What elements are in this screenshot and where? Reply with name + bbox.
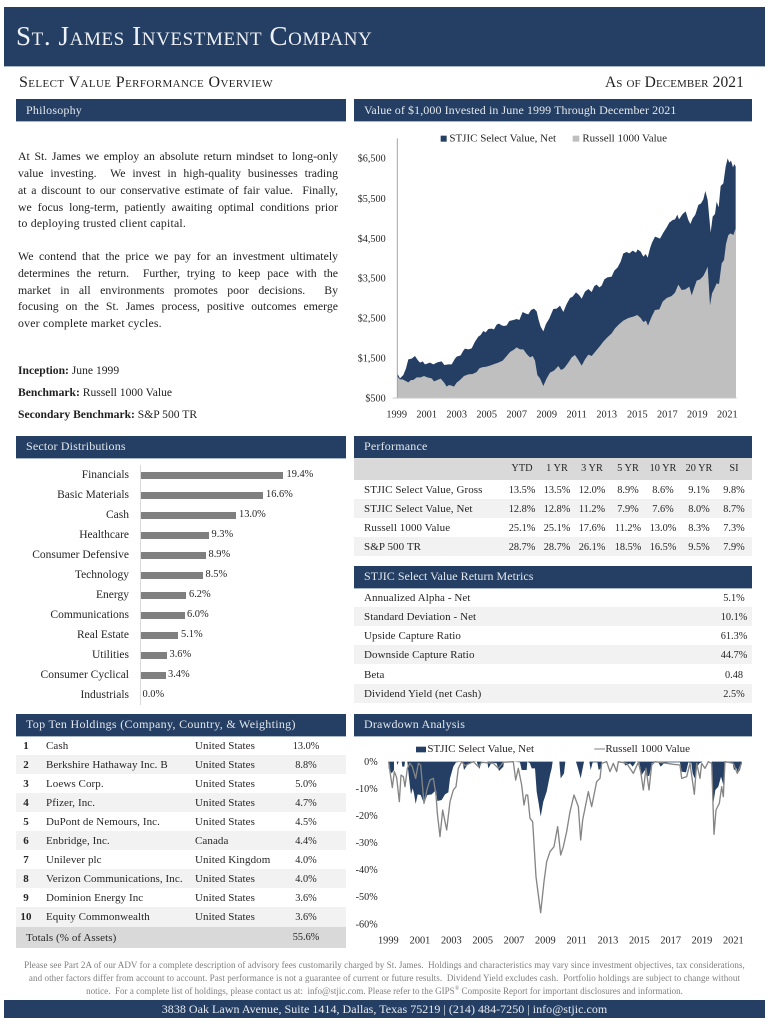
disclosure text: Please see Part 2A of our ADV for a complete description of advisory fees customarily charged by St. James. Holdings and characteristics may vary since investment objectives, tax considerations, <box>24 960 745 970</box>
holding 5: 5 <box>23 816 29 828</box>
paragraph two: We contend that the price we pay for an investment ultimately <box>18 249 338 263</box>
drawdown x axis labels: 2011 <box>567 935 587 946</box>
legend: Russell 1000 Value <box>582 133 667 145</box>
metric: dividend yield: 2.5% <box>723 689 745 700</box>
paragraph two: determines the return. Further, trying to keep pace with the <box>18 266 338 280</box>
row: gross: 8.6% <box>652 485 674 496</box>
drawdown x axis labels: 2001 <box>410 935 430 946</box>
drawdown x axis labels: 2015 <box>629 935 650 946</box>
holding 2: 2 <box>23 759 29 771</box>
y axis labels: $3,500 <box>358 274 386 285</box>
row: s&p 500: 28.7% <box>509 542 535 553</box>
drawdown y axis labels: -10% <box>356 784 378 795</box>
bar: cash: 13.0% <box>239 509 266 520</box>
heading: value of $1,000: Value of $1,000 Invested in June 1999 Through December 2021 <box>364 103 676 117</box>
disclosure text: and other factors differ from account to account. Past performance is not a guarantee of current or future results. Dividend Yield excludes cash. Portfolio holdings are subject to change without <box>29 973 740 983</box>
y axis labels: $1,500 <box>358 354 386 365</box>
holding 6 <box>16 831 346 850</box>
drawdown legend: STJIC Select Value, Net <box>427 743 534 755</box>
row: net <box>354 499 752 518</box>
metric: upside capture <box>364 630 747 642</box>
performance column headers: 5 YR <box>617 463 639 474</box>
bar: healthcare: 9.3% <box>212 529 233 540</box>
x axis labels <box>386 409 738 420</box>
y axis labels <box>358 154 386 405</box>
holding 4: 4.7% <box>295 798 317 809</box>
holding 1: 13.0% <box>293 741 319 752</box>
drawdown x axis labels <box>378 935 744 946</box>
holding 1: Cash <box>46 740 68 752</box>
paragraph two: market in all environments promotes poor decisions. By <box>18 283 338 297</box>
bar: energy <box>96 589 211 601</box>
holding 6: 6 <box>23 835 29 847</box>
holding 4 <box>16 793 346 812</box>
bar: industrials: 0.0% <box>142 689 164 700</box>
drawdown y axis labels: -30% <box>356 838 378 849</box>
disclosure text: notice. For a complete list of holdings, please contact us at: info@stjic.com. Please refer to the GIPS® Composite Report for important disclosures and information. <box>86 986 683 996</box>
metric: upside capture: 61.3% <box>721 631 747 642</box>
holding 1: 1 <box>23 740 29 752</box>
heading: sector distributions: Sector Distributions <box>26 439 126 453</box>
holding 10 <box>16 907 346 927</box>
bar: real estate: 5.1% <box>181 629 203 640</box>
heading: drawdown analysis <box>354 714 752 736</box>
row: s&p 500: 9.5% <box>688 542 710 553</box>
paragraph one: to deploying trusted client capital. <box>18 216 186 230</box>
metric: dividend yield <box>354 684 752 703</box>
row: s&p 500: 7.9% <box>723 542 745 553</box>
drawdown x axis labels: 2007 <box>504 935 524 946</box>
holding 9: 9 <box>23 892 29 904</box>
row: net: 12.8% <box>509 504 535 515</box>
bar: communications <box>50 609 209 621</box>
chart: sector distributions bar chart <box>32 465 313 705</box>
paragraph two: focusing on the St. James process, positive outcomes emerge <box>18 299 338 313</box>
performance column headers: 3 YR <box>581 463 603 474</box>
holding 2: 8.8% <box>295 760 317 771</box>
bar: industrials: Industrials <box>80 689 129 701</box>
drawdown y axis labels <box>356 757 378 930</box>
row: net: 7.9% <box>617 504 639 515</box>
heading: performance: Performance <box>364 439 428 453</box>
heading: philosophy: Philosophy <box>26 103 82 117</box>
drawdown x axis labels: 1999 <box>378 935 399 946</box>
bar: technology: Technology <box>75 569 129 581</box>
drawdown y axis labels: -60% <box>356 919 378 930</box>
holding 3: 3 <box>23 778 29 790</box>
drawdown legend <box>416 743 690 755</box>
metric: downside capture: Downside Capture Ratio <box>364 649 475 661</box>
bar: financials: Financials <box>82 469 129 481</box>
holding 9: Dominion Energy Inc <box>46 892 143 904</box>
row: russell 1000 value: 8.3% <box>688 523 710 534</box>
holding 10: Equity Commonwealth <box>46 911 150 923</box>
panel: philosophy text <box>18 149 338 421</box>
row: gross <box>364 484 745 496</box>
holding 5: 4.5% <box>295 817 317 828</box>
metric: standard deviation: Standard Deviation - Net <box>364 611 476 623</box>
row: s&p 500: 16.5% <box>650 542 676 553</box>
drawdown x axis labels: 2021 <box>723 935 744 946</box>
y axis labels: $500 <box>365 394 386 405</box>
row: russell 1000 value: Russell 1000 Value <box>364 522 450 534</box>
row: net: STJIC Select Value, Net <box>364 503 473 515</box>
metric: alpha: Annualized Alpha - Net <box>364 592 471 604</box>
row: gross: 9.8% <box>723 485 745 496</box>
heading: philosophy <box>16 99 346 121</box>
row: russell 1000 value: 7.3% <box>723 523 745 534</box>
row: gross: 13.5% <box>509 485 535 496</box>
paragraph two: over complete market cycles. <box>18 316 162 330</box>
benchmark: Benchmark: Russell 1000 Value <box>18 386 172 399</box>
row: net: 11.2% <box>579 504 605 515</box>
row: russell 1000 value <box>364 522 745 534</box>
performance column headers: 20 YR <box>686 463 712 474</box>
metric: standard deviation <box>354 607 752 626</box>
holding 7: Unilever plc <box>46 854 102 866</box>
row: net: 8.7% <box>723 504 745 515</box>
row: gross: 13.5% <box>544 485 570 496</box>
row: russell 1000 value: 25.1% <box>509 523 535 534</box>
paragraph one <box>18 149 338 230</box>
title: St. James Investment Company <box>16 21 372 51</box>
holding 9: 3.6% <box>295 893 317 904</box>
drawdown x axis labels: 2017 <box>660 935 681 946</box>
holding 5: United States <box>195 816 255 828</box>
heading: value of $1,000 <box>354 99 752 121</box>
holding 4: 4 <box>23 797 29 809</box>
heading: drawdown analysis: Drawdown Analysis <box>364 717 465 731</box>
row: net: 7.6% <box>652 504 674 515</box>
heading: top ten holdings <box>16 714 346 736</box>
holding 6: Enbridge, Inc. <box>46 835 110 847</box>
bar: healthcare <box>79 529 233 541</box>
performance column headers <box>354 458 752 480</box>
legend <box>441 133 667 145</box>
axes <box>393 138 737 398</box>
table: return metrics <box>354 592 752 703</box>
area: Russell 1000 Value <box>397 228 736 398</box>
bar: real estate: Real Estate <box>77 629 129 641</box>
bar: cash <box>106 509 266 521</box>
holding 3: United States <box>195 778 255 790</box>
row: s&p 500: S&P 500 TR <box>364 541 421 553</box>
y axis labels: $6,500 <box>358 154 386 165</box>
holding 10: 10 <box>20 911 32 923</box>
drawdown y axis labels: 0% <box>364 757 378 768</box>
holding 2: Berkshire Hathaway Inc. B <box>46 759 168 771</box>
bar: communications: Communications <box>50 609 129 621</box>
holding 6: 4.4% <box>295 836 317 847</box>
holding 1: United States <box>195 740 255 752</box>
holding 2 <box>16 755 346 774</box>
area: STJIC drawdown <box>389 762 742 817</box>
drawdown y axis labels: -40% <box>356 865 378 876</box>
holding 7: United Kingdom <box>195 854 270 866</box>
bar: cash: Cash <box>106 509 129 521</box>
metric: downside capture <box>354 645 752 664</box>
row: gross: 12.0% <box>579 485 605 496</box>
paragraph one: value investing. We invest in high-quality businesses trading <box>18 166 338 180</box>
performance column headers: SI <box>729 463 739 474</box>
bar: basic materials: 16.6% <box>266 489 293 500</box>
bar: basic materials: Basic Materials <box>57 489 129 501</box>
totals row <box>16 927 346 948</box>
row: russell 1000 value: 17.6% <box>579 523 605 534</box>
row: net: 8.0% <box>688 504 710 515</box>
holding 6: Canada <box>195 835 228 847</box>
bar: healthcare: Healthcare <box>79 529 129 541</box>
holding 10: United States <box>195 911 255 923</box>
row: s&p 500 <box>354 537 752 556</box>
holding 4: Pfizer, Inc. <box>46 797 95 809</box>
secondary benchmark: Secondary Benchmark: S&P 500 TR <box>18 408 197 421</box>
metric: beta: 0.48 <box>725 670 743 681</box>
bar: consumer cyclical: Consumer Cyclical <box>41 669 129 681</box>
inception: Inception: June 1999 <box>18 364 119 377</box>
bar: utilities: Utilities <box>92 649 129 661</box>
totals row: Totals (% of Assets) <box>26 932 116 944</box>
footer contact bar: 3838 Oak Lawn Avenue, Suite 1414, Dallas, Texas 75219 | (214) 484-7250 | info@stjic.com <box>162 1002 607 1016</box>
holding 3: Loews Corp. <box>46 778 104 790</box>
performance column headers: YTD <box>511 463 533 474</box>
subtitle: Select Value Performance Overview <box>19 74 273 91</box>
drawdown legend: Russell 1000 Value <box>605 743 690 755</box>
bar: consumer defensive: Consumer Defensive <box>32 549 129 561</box>
heading: return metrics: STJIC Select Value Return Metrics <box>364 569 533 583</box>
y axis labels: $5,500 <box>358 194 386 205</box>
paragraph two <box>18 249 338 330</box>
bar: real estate <box>77 629 203 641</box>
holding 8 <box>16 869 346 888</box>
holding 1 <box>23 740 319 752</box>
paragraph one: at a discount to our conservative estimate of fair value. Finally, <box>18 183 338 197</box>
holding 5: DuPont de Nemours, Inc. <box>46 816 160 828</box>
bar: utilities <box>92 649 191 661</box>
row: gross: 9.1% <box>688 485 710 496</box>
row: s&p 500: 28.7% <box>544 542 570 553</box>
holding 5 <box>23 816 317 828</box>
drawdown x axis labels: 2005 <box>472 935 493 946</box>
chart: drawdown analysis <box>356 743 744 946</box>
footer contact bar <box>4 1000 765 1018</box>
disclosure text <box>24 960 745 996</box>
metric: upside capture: Upside Capture Ratio <box>364 630 461 642</box>
totals row: 55.6% <box>293 932 319 943</box>
bar: utilities: 3.6% <box>170 649 191 660</box>
report date: As of December 2021 <box>605 74 744 91</box>
metric: downside capture: 44.7% <box>721 650 747 661</box>
area: STJIC Select Value, Net <box>397 158 736 398</box>
metric: beta <box>364 669 743 681</box>
holding 2: United States <box>195 759 255 771</box>
drawdown x axis labels: 2003 <box>441 935 462 946</box>
row: s&p 500: 26.1% <box>579 542 605 553</box>
legend: STJIC Select Value, Net <box>449 133 556 145</box>
bar: financials: 19.4% <box>286 469 313 480</box>
drawdown x axis labels: 2013 <box>598 935 618 946</box>
heading: sector distributions <box>16 436 346 458</box>
bar: consumer defensive: 8.9% <box>208 549 230 560</box>
performance column headers: 10 YR <box>650 463 676 474</box>
heading: top ten holdings: Top Ten Holdings (Company, Country, & Weighting) <box>26 717 296 731</box>
bar: communications: 6.0% <box>187 609 209 620</box>
row: gross: STJIC Select Value, Gross <box>364 484 483 496</box>
bar: industrials <box>80 689 164 701</box>
line: Russell 1000 drawdown <box>389 762 742 913</box>
row: net: 12.8% <box>544 504 570 515</box>
metric: alpha: 5.1% <box>723 593 745 604</box>
holding 8: 8 <box>23 873 29 885</box>
holding 4: United States <box>195 797 255 809</box>
metric: dividend yield: Dividend Yield (net Cash) <box>364 688 481 700</box>
y axis labels: $4,500 <box>358 234 386 245</box>
bar: consumer defensive <box>32 549 230 561</box>
bar: technology <box>75 569 227 581</box>
title banner <box>4 7 765 66</box>
bar: technology: 8.5% <box>206 569 227 580</box>
heading: performance <box>354 436 752 458</box>
chart: value of $1,000 area chart <box>358 133 738 420</box>
bar: consumer cyclical: 3.4% <box>168 669 190 680</box>
holding 8: Verizon Communications, Inc. <box>46 873 183 885</box>
holding 7: 7 <box>23 854 29 866</box>
holding 9 <box>23 892 317 904</box>
paragraph one: we focus long-term, patiently awaiting optimal conditions prior <box>18 200 338 214</box>
row: russell 1000 value: 11.2% <box>615 523 641 534</box>
drawdown x axis labels: 2009 <box>535 935 556 946</box>
holding 3: 5.0% <box>295 779 317 790</box>
holding 10: 3.6% <box>295 912 317 923</box>
row: gross: 8.9% <box>617 485 639 496</box>
bar: energy: Energy <box>96 589 129 601</box>
holding 8: 4.0% <box>295 874 317 885</box>
drawdown y axis labels: -20% <box>356 811 378 822</box>
row: s&p 500: 18.5% <box>615 542 641 553</box>
table: top ten holdings <box>16 740 346 948</box>
paragraph one: At St. James we employ an absolute return mindset to long-only <box>18 149 338 163</box>
holding 7: 4.0% <box>295 855 317 866</box>
holding 9: United States <box>195 892 255 904</box>
bar: basic materials <box>57 489 293 501</box>
bar: consumer cyclical <box>41 669 190 681</box>
metric: beta: Beta <box>364 669 384 681</box>
bar: energy: 6.2% <box>189 589 211 600</box>
holding 7 <box>23 854 317 866</box>
y axis labels: $2,500 <box>358 314 386 325</box>
bar: financials <box>82 469 313 481</box>
heading: return metrics <box>354 566 752 588</box>
drawdown y axis labels: -50% <box>356 892 378 903</box>
metric: alpha <box>364 592 745 604</box>
performance column headers: 1 YR <box>546 463 568 474</box>
row: russell 1000 value: 13.0% <box>650 523 676 534</box>
metric: standard deviation: 10.1% <box>721 612 747 623</box>
holding 3 <box>23 778 317 790</box>
holding 8: United States <box>195 873 255 885</box>
table: performance <box>354 458 752 556</box>
drawdown x axis labels: 2019 <box>692 935 712 946</box>
row: russell 1000 value: 25.1% <box>544 523 570 534</box>
